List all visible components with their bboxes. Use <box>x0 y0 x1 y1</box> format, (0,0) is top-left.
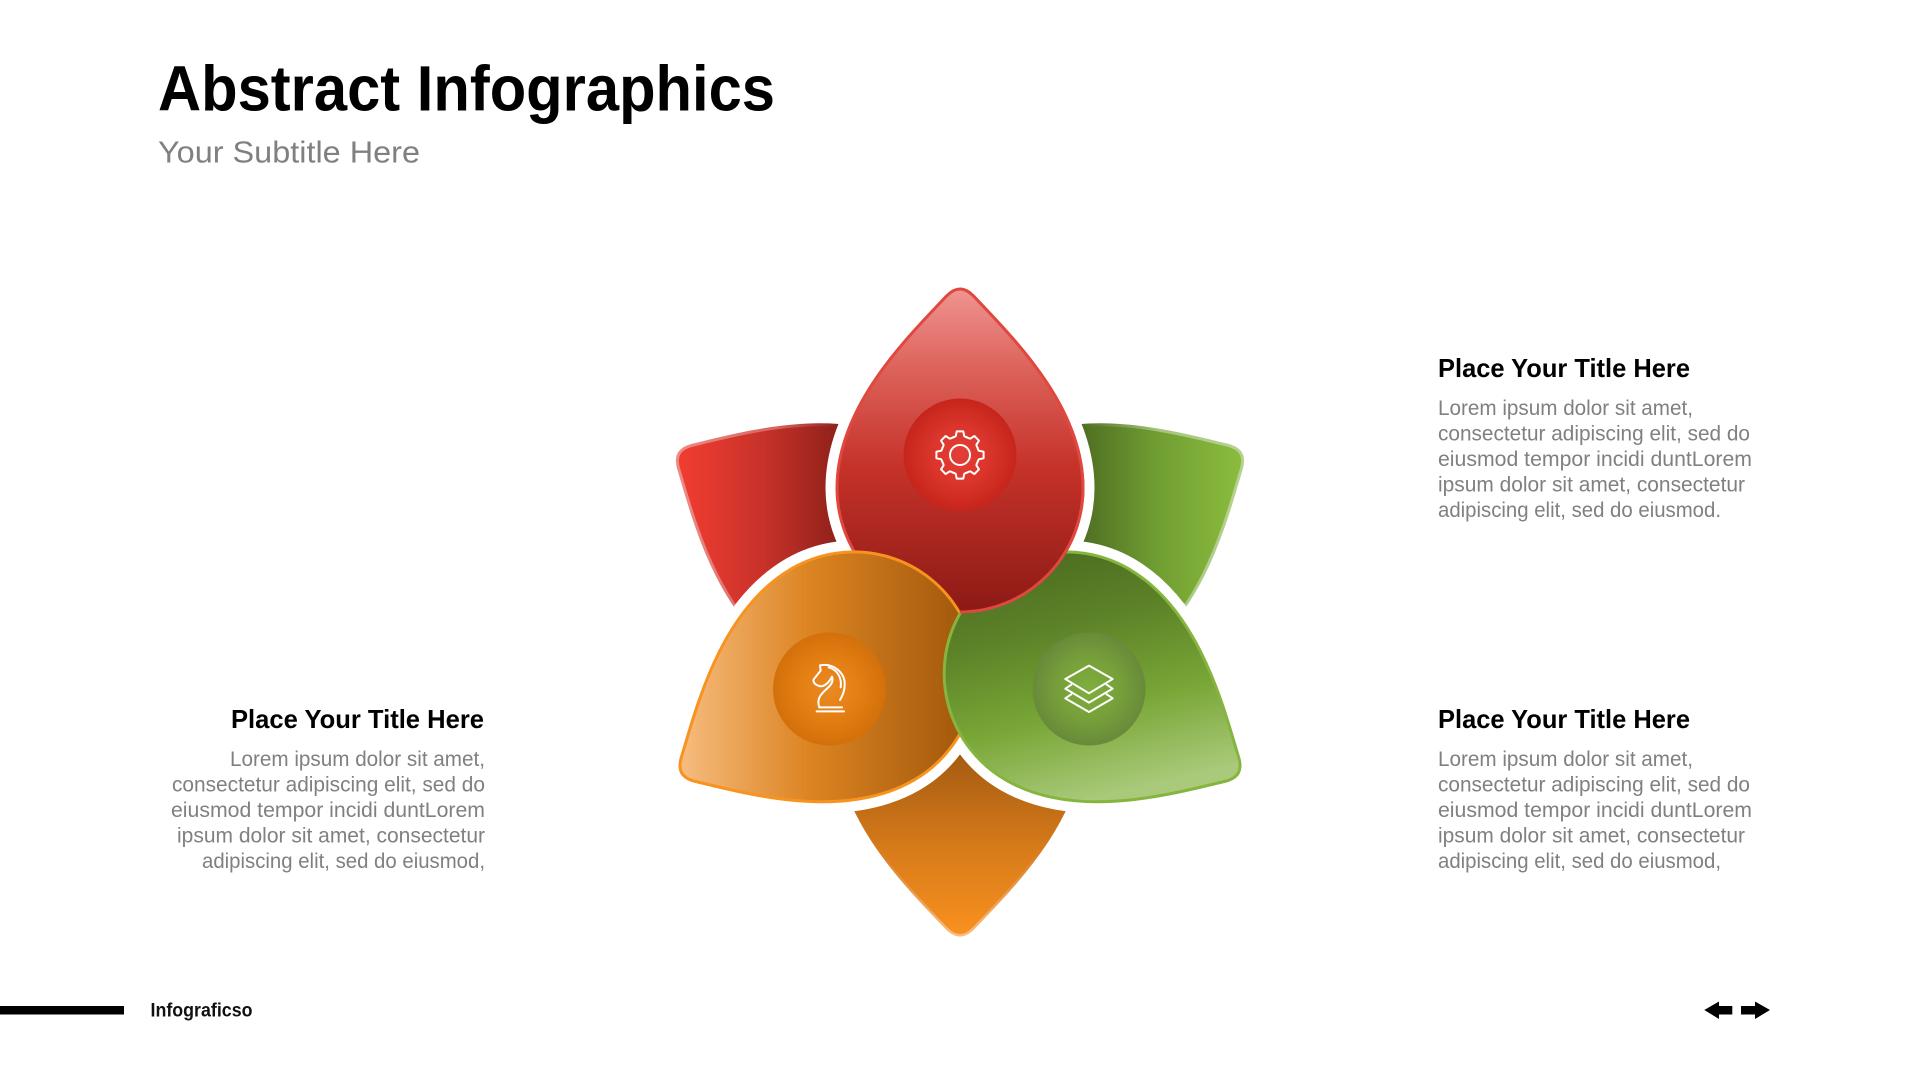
flower diagram <box>676 288 1244 937</box>
back petal: green upper right <box>902 348 1302 720</box>
text block: bottom right <box>1438 704 1752 873</box>
icon circle: orange <box>773 632 886 746</box>
body text: adipiscing elit, sed do eiusmod. <box>1438 499 1721 522</box>
body text: eiusmod tempor incidi duntLorem <box>171 799 485 822</box>
body text: adipiscing elit, sed do eiusmod, <box>202 850 485 873</box>
body text: consectetur adipiscing elit, sed do <box>1438 774 1750 796</box>
body text: Lorem ipsum dolor sit amet, <box>1438 397 1693 420</box>
front petal: green lower right <box>899 507 1299 879</box>
icon: chess knight <box>813 665 845 711</box>
body text: consectetur adipiscing elit, sed do <box>1438 422 1750 446</box>
footer bar <box>0 1006 124 1014</box>
body text <box>1438 748 1752 873</box>
icon circle: green <box>1032 632 1146 746</box>
white halo behind front petals <box>621 289 1299 879</box>
heading: Place Your Title Here <box>1438 704 1690 734</box>
text block: bottom left <box>171 704 485 873</box>
icon circle: red <box>904 398 1016 512</box>
body text <box>1438 397 1752 522</box>
icon: gear <box>936 431 984 479</box>
body text: adipiscing elit, sed do eiusmod, <box>1438 850 1721 873</box>
body text: consectetur adipiscing elit, sed do <box>172 774 485 796</box>
arrow: previous <box>1704 1002 1732 1019</box>
body text: Lorem ipsum dolor sit amet, <box>230 748 485 771</box>
title: Abstract Infographics <box>158 52 775 124</box>
body text: Lorem ipsum dolor sit amet, <box>1438 748 1693 771</box>
text block: top right <box>1438 353 1752 522</box>
front petal: orange lower left <box>621 507 1021 879</box>
arrow: next <box>1741 1002 1770 1019</box>
footer brand: Infograficso <box>150 1000 252 1022</box>
back petal: orange bottom <box>837 612 1083 935</box>
body text: eiusmod tempor incidi duntLorem <box>1438 448 1752 471</box>
body text: eiusmod tempor incidi duntLorem <box>1438 799 1752 822</box>
back petal: red upper left <box>618 348 1018 720</box>
body text: ipsum dolor sit amet, consectetur <box>1438 474 1745 496</box>
heading: Place Your Title Here <box>1438 353 1690 383</box>
red petal overlap over green <box>960 288 1084 614</box>
heading: Place Your Title Here <box>231 704 484 734</box>
body text: ipsum dolor sit amet, consectetur <box>177 824 485 848</box>
body text: ipsum dolor sit amet, consectetur <box>1438 824 1745 848</box>
body text <box>171 748 485 873</box>
front petal: red top <box>837 289 1083 612</box>
subtitle: Your Subtitle Here <box>158 134 420 170</box>
icon: layers <box>1065 666 1113 712</box>
